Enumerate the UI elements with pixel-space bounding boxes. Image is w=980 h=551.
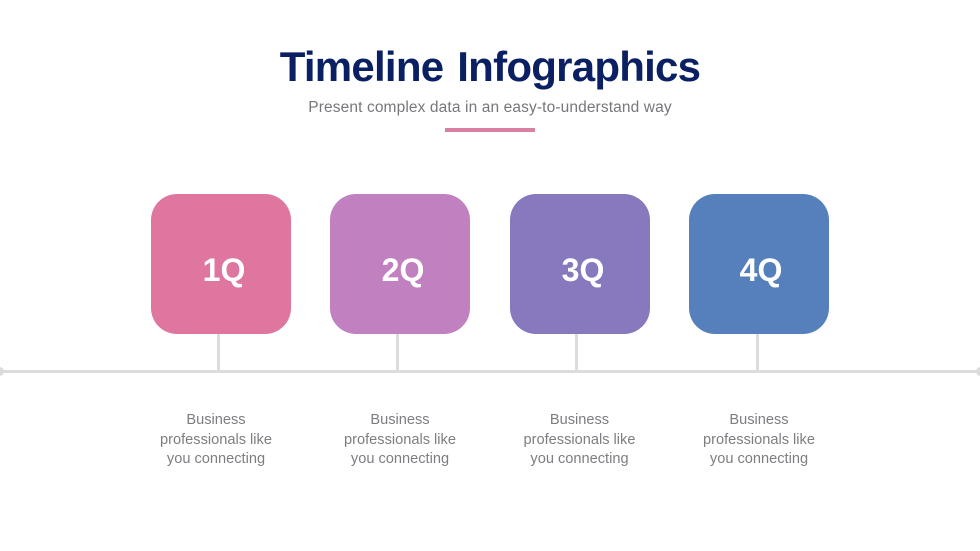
caption: 1Q bbox=[160, 412, 272, 467]
caption: 4Q bbox=[703, 412, 815, 467]
caption: 3Q bbox=[524, 412, 635, 467]
connector: 4Q bbox=[756, 334, 759, 371]
caption: 1Q: Business bbox=[186, 412, 246, 428]
subtitle: Present complex data in an easy-to-understand way bbox=[308, 99, 672, 116]
card: 1Q: 1Q bbox=[203, 252, 245, 288]
card: 2Q bbox=[330, 194, 470, 334]
caption: 1Q: professionals like bbox=[160, 432, 272, 448]
timeline left end dot bbox=[0, 367, 4, 376]
card: 4Q: 4Q bbox=[740, 252, 782, 288]
caption: 3Q: you connecting bbox=[530, 451, 629, 467]
card: 3Q: 3Q bbox=[562, 252, 604, 288]
connector: 1Q bbox=[217, 334, 220, 371]
card: 2Q: 2Q bbox=[382, 252, 424, 288]
caption: 1Q: you connecting bbox=[167, 451, 265, 467]
caption: 2Q: professionals like bbox=[344, 432, 456, 448]
caption: 2Q: you connecting bbox=[351, 451, 449, 467]
card: 3Q bbox=[510, 194, 650, 334]
card: 4Q bbox=[689, 194, 829, 334]
connector: 3Q bbox=[575, 334, 578, 371]
caption: 4Q: professionals like bbox=[703, 432, 815, 448]
timeline axis bbox=[0, 370, 980, 373]
caption: 4Q: you connecting bbox=[710, 451, 808, 467]
caption: 2Q: Business bbox=[370, 412, 430, 428]
timeline right end dot bbox=[976, 367, 980, 376]
connector: 2Q bbox=[396, 334, 399, 371]
title: Timeline Infographics bbox=[280, 43, 700, 90]
caption: 4Q: Business bbox=[729, 412, 789, 428]
caption: 3Q: Business bbox=[550, 412, 609, 428]
title accent underline bbox=[445, 128, 535, 132]
caption: 3Q: professionals like bbox=[524, 432, 635, 448]
caption: 2Q bbox=[344, 412, 456, 467]
card: 1Q bbox=[151, 194, 291, 334]
